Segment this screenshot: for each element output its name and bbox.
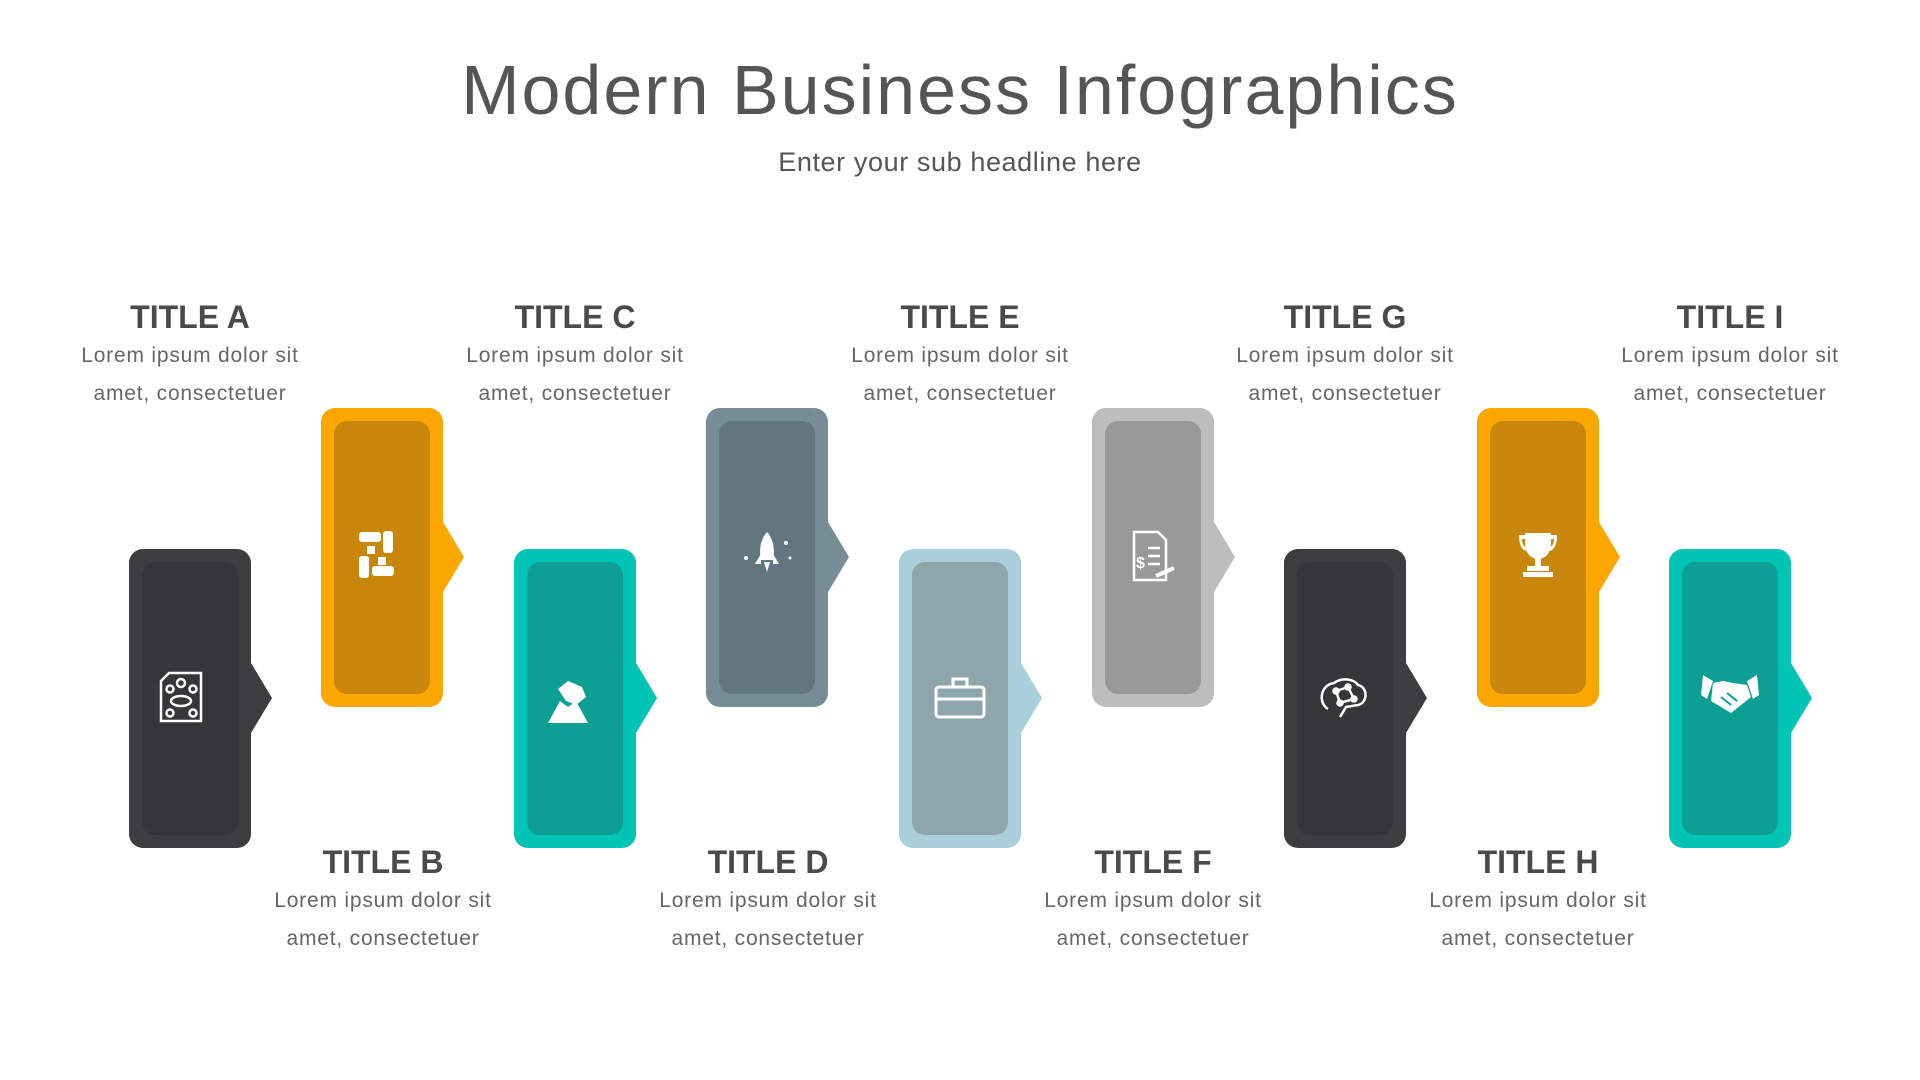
- text: title B: TITLE B: [323, 844, 443, 880]
- icon: flowchart doc: [161, 673, 201, 721]
- text: title C: Lorem ipsum dolor sit: [466, 344, 684, 367]
- text: title F: amet, consectetuer: [1056, 927, 1250, 950]
- text: title E: TITLE E: [900, 299, 1020, 335]
- text: title H: [1429, 844, 1647, 950]
- subtitle: Enter your sub headline here: [778, 147, 1142, 177]
- text: title A: TITLE A: [130, 299, 250, 335]
- text: title D: Lorem ipsum dolor sit: [659, 889, 877, 912]
- card A: [129, 549, 272, 848]
- icon: brain network: [1322, 679, 1366, 717]
- text: title D: [659, 844, 877, 950]
- text: title D: TITLE D: [708, 844, 828, 880]
- text: title H: amet, consectetuer: [1442, 927, 1634, 950]
- text: title F: [1044, 844, 1262, 950]
- text: title A: amet, consectetuer: [94, 382, 286, 405]
- text: title I: [1621, 299, 1839, 405]
- text: title I: TITLE I: [1677, 299, 1783, 335]
- text: title F: Lorem ipsum dolor sit: [1044, 889, 1262, 912]
- icon: rocket: [744, 532, 792, 572]
- card D: [706, 408, 849, 707]
- text: title A: [81, 299, 299, 405]
- text: title G: amet, consectetuer: [1248, 382, 1442, 405]
- text: title I: amet, consectetuer: [1634, 382, 1826, 405]
- card I: [1669, 549, 1812, 848]
- text: title C: [466, 299, 684, 405]
- text: title G: TITLE G: [1284, 299, 1406, 335]
- icon: handshake arms: [548, 681, 588, 723]
- icon: briefcase: [936, 679, 984, 717]
- icon: trophy: [1519, 533, 1557, 577]
- text: title C: TITLE C: [515, 299, 635, 335]
- card G: [1284, 549, 1427, 848]
- text: title D: amet, consectetuer: [672, 927, 864, 950]
- text: title E: amet, consectetuer: [864, 382, 1056, 405]
- text: title G: [1236, 299, 1454, 405]
- text: title H: TITLE H: [1478, 844, 1598, 880]
- text: title B: Lorem ipsum dolor sit: [274, 889, 492, 912]
- text: title A: Lorem ipsum dolor sit: [81, 344, 299, 367]
- card F: [1092, 408, 1235, 707]
- text: title B: amet, consectetuer: [286, 927, 480, 950]
- icon: hands: [359, 531, 394, 578]
- text: title B: [274, 844, 492, 950]
- icon: invoice: [1134, 532, 1174, 580]
- card B: [321, 408, 464, 707]
- card C: [514, 549, 657, 848]
- text: title I: Lorem ipsum dolor sit: [1621, 344, 1839, 367]
- text: title E: [851, 299, 1069, 405]
- text: title C: amet, consectetuer: [478, 382, 672, 405]
- text: title H: Lorem ipsum dolor sit: [1429, 889, 1647, 912]
- icon: handshake: [1701, 675, 1759, 713]
- card H: [1477, 408, 1620, 707]
- icon: invoice: $: [1136, 555, 1145, 572]
- text: title F: TITLE F: [1094, 844, 1212, 880]
- text: title G: Lorem ipsum dolor sit: [1236, 344, 1454, 367]
- card E: [899, 549, 1042, 848]
- text: title E: Lorem ipsum dolor sit: [851, 344, 1069, 367]
- title: Modern Business Infographics: [461, 51, 1459, 129]
